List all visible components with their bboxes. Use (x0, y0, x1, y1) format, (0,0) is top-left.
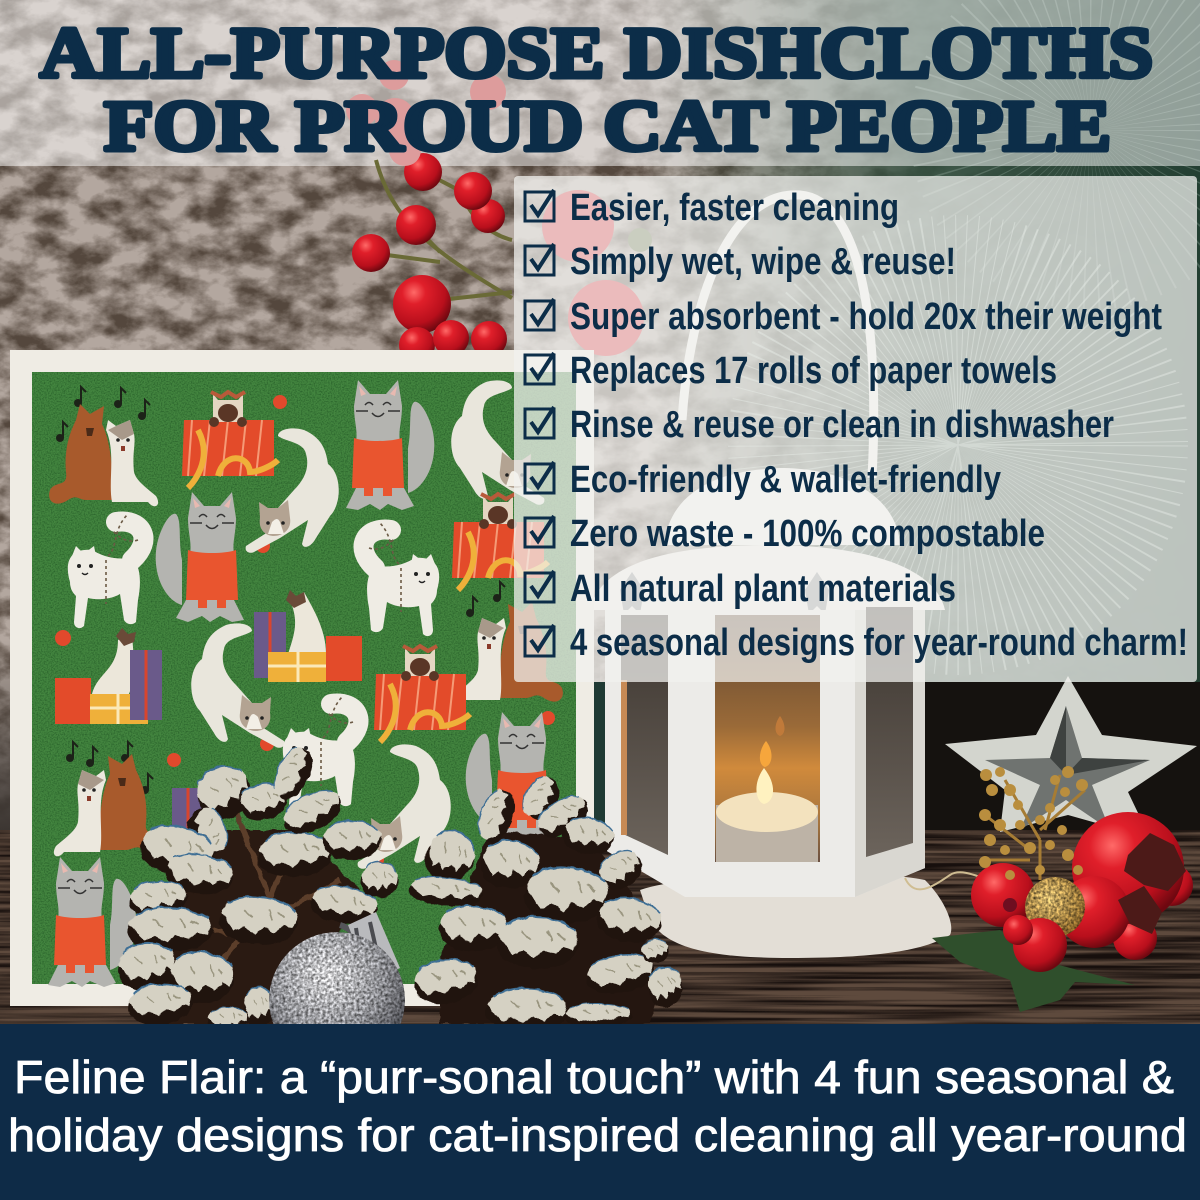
title: ALL-PURPOSE DISHCLOTHS (40, 13, 1153, 93)
gift stacks with cats (55, 590, 362, 830)
item 6: Eco-friendly & wallet-friendly (570, 459, 1001, 501)
lantern handle behind panel (590, 195, 945, 614)
green printed pattern (32, 372, 576, 987)
pine needle bursts (843, 40, 1180, 560)
tealight candle (716, 716, 818, 862)
item 1: Easier, faster cleaning (570, 187, 899, 229)
bottom caption band (0, 1024, 1200, 1200)
benefits checklist panel (514, 176, 1197, 682)
white lantern (605, 607, 951, 958)
bottom caption band: holiday designs for cat-inspired cleaning all year-round (8, 1109, 1187, 1161)
dishcloth (10, 350, 594, 1006)
red berry branch (346, 60, 512, 363)
item 8: All natural plant materials (570, 568, 956, 610)
ornaments (55, 395, 555, 866)
silver ball ornament (269, 912, 405, 1068)
title (40, 13, 1153, 166)
cats (48, 380, 563, 987)
red fruit and gold sprig (971, 766, 1193, 972)
item 7: Zero waste - 100% compostable (570, 513, 1045, 555)
holly leaves (932, 930, 1135, 1012)
item 2: Simply wet, wipe & reuse! (570, 241, 956, 283)
blurred berries behind panel (542, 190, 652, 356)
silver star ornament (945, 676, 1197, 838)
top title band overlay (0, 0, 1200, 166)
lantern windows (621, 607, 913, 862)
lantern base (640, 873, 951, 958)
item 4: Replaces 17 rolls of paper towels (570, 350, 1057, 392)
pinecones (117, 741, 686, 1034)
right pinecone (407, 771, 686, 1034)
bottom caption band: Feline Flair: a “purr-sonal touch” with 4 fun seasonal & (14, 1051, 1174, 1103)
title: FOR PROUD CAT PEOPLE (104, 86, 1111, 166)
music notes (56, 387, 505, 794)
string (905, 872, 1040, 895)
left pinecone (117, 741, 400, 1031)
